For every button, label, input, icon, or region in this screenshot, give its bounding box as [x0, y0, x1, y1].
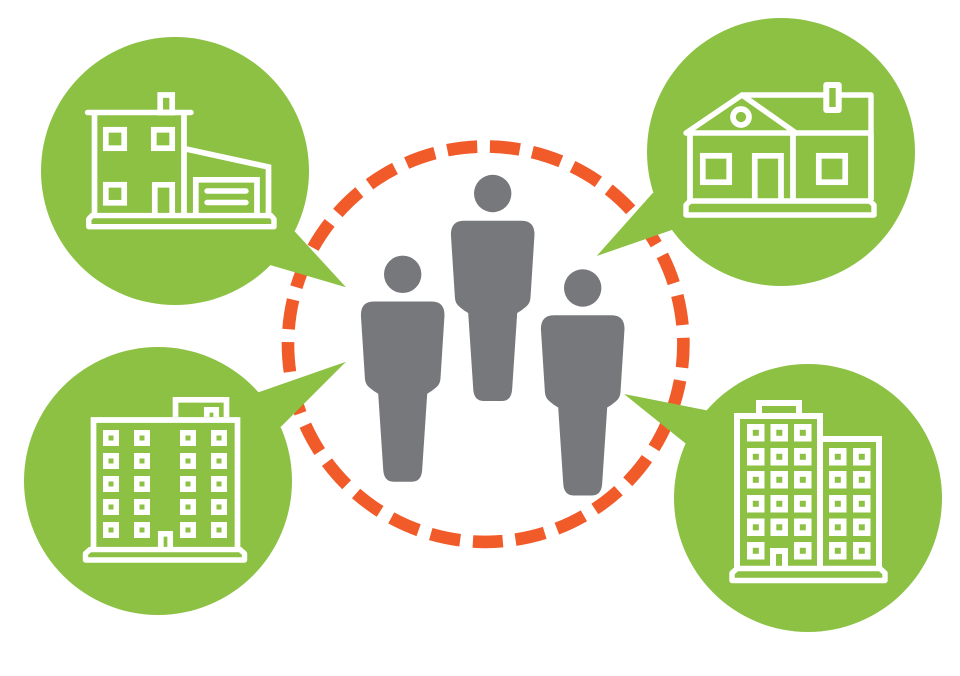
icon: high-rise towers [732, 403, 885, 580]
icon: person right [541, 269, 624, 496]
bubble shape [24, 347, 346, 615]
bubble shape [597, 18, 915, 286]
dashed orange ring [288, 147, 683, 542]
icon: gabled family house [686, 85, 874, 215]
bubble shape [41, 37, 346, 305]
icon: person centre [451, 175, 534, 401]
group of three people [361, 175, 624, 496]
icon: low-rise apartment block [86, 400, 244, 560]
panel: speech bubble with two-storey house and garage [41, 37, 346, 305]
panel: speech bubble with gabled family house [597, 18, 915, 286]
icon: two-storey house with garage [88, 95, 274, 227]
panel: speech bubble with low-rise apartment block [24, 347, 346, 615]
icon: person left [361, 256, 444, 482]
panel: speech bubble with high-rise towers [624, 364, 942, 632]
bubble shape [624, 364, 942, 632]
